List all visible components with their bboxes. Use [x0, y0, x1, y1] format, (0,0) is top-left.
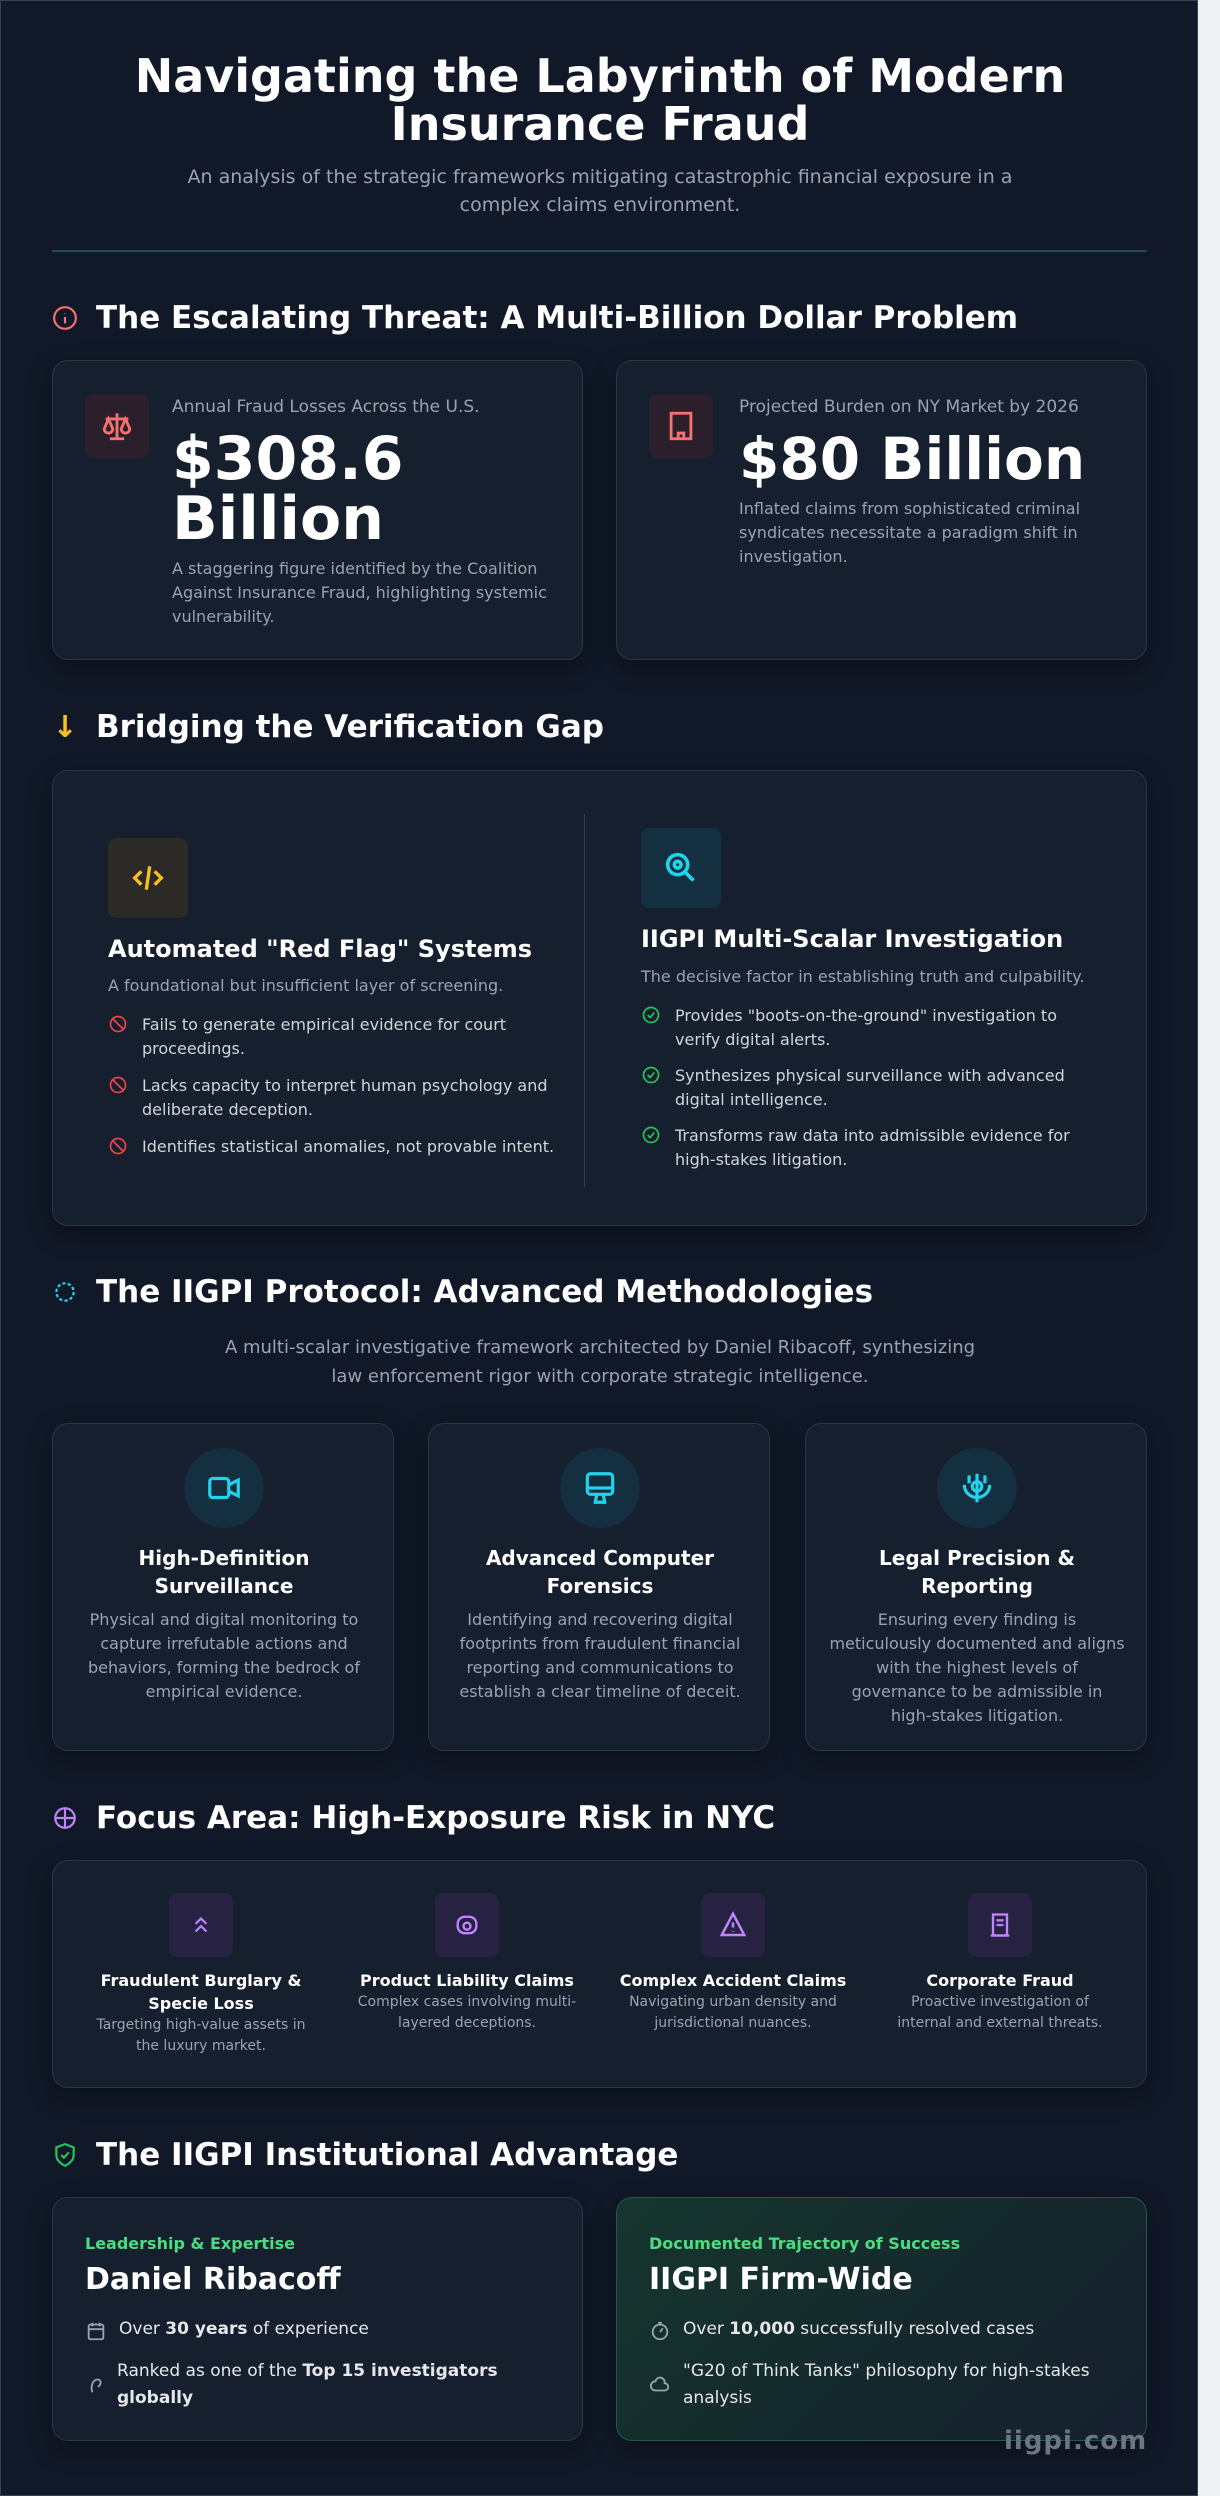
card: forensics: Advanced Computer: [486, 1546, 714, 1570]
icon: legal: [937, 1448, 1017, 1528]
card: US losses: A staggering figure identified by the Coalition Against Insurance Fraud, highlighting systemic vulnerability.: [172, 559, 547, 626]
list: strengths: Transforms raw data into admissible evidence for high-stakes litigation.: [675, 1126, 1070, 1169]
icon: code: [108, 838, 188, 918]
icon: monitor: [560, 1448, 640, 1528]
heading: verification gap: ↓: [52, 710, 78, 744]
list: limitations: Lacks capacity to interpret human psychology and deliberate deception.: [142, 1076, 547, 1119]
title: Navigating the Labyrinth of Modern: [135, 49, 1065, 103]
card: legal: Ensuring every finding is: [878, 1610, 1076, 1629]
card: leadership: [52, 2197, 583, 2441]
item: ranking: Ranked as one of the Top 15 investigators globally: [117, 2361, 498, 2408]
card: leadership: Leadership & Expertise: [85, 2234, 295, 2253]
card: forensics: Forensics: [547, 1574, 653, 1598]
card: US losses: $308.6: [172, 424, 404, 494]
card: legal: Reporting: [921, 1574, 1033, 1598]
card: surveillance: Physical and digital monitoring to capture irrefutable actions and behaviors, forming the bedrock of empirical evidence.: [88, 1610, 360, 1701]
card: legal: governance to be admissible in: [852, 1682, 1102, 1701]
title: [135, 49, 1065, 151]
icon: video: [184, 1448, 264, 1528]
card: firm-wide: [616, 2197, 1147, 2441]
card: NY burden: $80 Billion: [739, 425, 1085, 493]
card: firm-wide: Documented Trajectory of Success: [649, 2234, 960, 2253]
card: US losses: Annual Fraud Losses Across the U.S.: [172, 397, 480, 417]
heading: focus area: Focus Area: High-Exposure Risk in NYC: [96, 1800, 775, 1836]
card: NY burden: [616, 360, 1147, 660]
item: accident: Navigating urban density and: [629, 1994, 837, 2010]
heading: institutional advantage: The IIGPI Institutional Advantage: [96, 2137, 678, 2173]
card: surveillance: High-Definition: [139, 1546, 309, 1570]
item: burglary: Targeting high-value assets in: [96, 2017, 306, 2033]
card: legal: [805, 1423, 1147, 1751]
card: firm-wide: IIGPI Firm-Wide: [649, 2262, 913, 2297]
item: corporate fraud: internal and external threats.: [897, 2015, 1103, 2031]
item: cases: Over 10,000 successfully resolved cases: [683, 2319, 1034, 2339]
watermark: iigpi.com: [1004, 2426, 1147, 2456]
card: forensics: [428, 1423, 770, 1751]
card: legal: high-stakes litigation.: [891, 1706, 1063, 1725]
intro text: A multi-scalar investigative framework architected by Daniel Ribacoff, synthesizing law enforcement rigor with corporate strategic intelligence.: [225, 1337, 975, 1387]
right column: IIGPI investigation: [640, 828, 1085, 1169]
item: burglary: Fraudulent Burglary &: [101, 1971, 301, 1990]
card: US losses: [52, 360, 583, 660]
right column: IIGPI investigation: The decisive factor in establishing truth and culpability.: [641, 967, 1085, 986]
item: accident: [620, 1893, 846, 2031]
list: strengths: Provides "boots-on-the-ground" investigation to verify digital alerts.: [675, 1006, 1057, 1049]
card: NY burden: Inflated claims from sophisticated criminal syndicates necessitate a paradigm shift in investigation.: [739, 499, 1080, 566]
left column: red flag systems: Automated "Red Flag" Systems: [108, 935, 532, 963]
card: forensics: Identifying and recovering digital footprints from fraudulent financial reporting and communications to establish a clear timeline of deceit.: [459, 1610, 741, 1701]
card: surveillance: Surveillance: [155, 1574, 293, 1598]
card: legal: meticulously documented and aligns: [829, 1634, 1125, 1653]
item: accident: jurisdictional nuances.: [654, 2015, 812, 2031]
card: NY burden: Projected Burden on NY Market by 2026: [739, 397, 1079, 417]
list: strengths: [642, 1006, 1070, 1169]
item: corporate fraud: Corporate Fraud: [926, 1971, 1074, 1990]
item: think tanks: "G20 of Think Tanks" philosophy for high-stakes analysis: [683, 2361, 1090, 2408]
item: experience: Over 30 years of experience: [119, 2319, 369, 2339]
list: strengths: Synthesizes physical surveillance with advanced digital intelligence.: [675, 1066, 1065, 1109]
card: legal: Legal Precision &: [879, 1546, 1075, 1570]
item: burglary: [96, 1893, 306, 2054]
panel: verification gap: [52, 770, 1147, 1226]
list: limitations: [110, 1015, 554, 1156]
right column: IIGPI investigation: IIGPI Multi-Scalar Investigation: [641, 925, 1063, 953]
card: US losses: Billion: [172, 484, 384, 554]
icon: building: [649, 394, 713, 458]
list: limitations: Fails to generate empirical evidence for court proceedings.: [142, 1015, 506, 1058]
item: burglary: Specie Loss: [148, 1994, 254, 2013]
icon: search: [641, 828, 721, 908]
heading: escalating threat: The Escalating Threat: A Multi-Billion Dollar Problem: [96, 300, 1018, 336]
card: surveillance: [52, 1423, 394, 1751]
item: product liability: layered deceptions.: [398, 2015, 536, 2031]
left column: red flag systems: [108, 838, 554, 1156]
heading: verification gap: Bridging the Verification Gap: [96, 709, 604, 745]
item: product liability: Complex cases involving multi-: [358, 1994, 576, 2010]
item: accident: Complex Accident Claims: [620, 1971, 846, 1990]
panel: focus areas: [52, 1860, 1147, 2088]
card: leadership: Daniel Ribacoff: [85, 2262, 341, 2297]
item: product liability: [358, 1893, 576, 2031]
card: legal: with the highest levels of: [876, 1658, 1078, 1677]
subtitle: An analysis of the strategic frameworks mitigating catastrophic financial exposure in a complex claims environment.: [188, 166, 1012, 216]
item: product liability: Product Liability Claims: [360, 1971, 574, 1990]
title: Insurance Fraud: [391, 97, 809, 151]
list: limitations: Identifies statistical anomalies, not provable intent.: [142, 1137, 554, 1156]
item: corporate fraud: [897, 1893, 1103, 2031]
icon: scales: [85, 394, 149, 458]
left column: red flag systems: A foundational but insufficient layer of screening.: [108, 976, 503, 995]
heading: protocol: The IIGPI Protocol: Advanced Methodologies: [96, 1274, 873, 1310]
item: burglary: the luxury market.: [136, 2038, 266, 2054]
item: corporate fraud: Proactive investigation of: [911, 1994, 1089, 2010]
